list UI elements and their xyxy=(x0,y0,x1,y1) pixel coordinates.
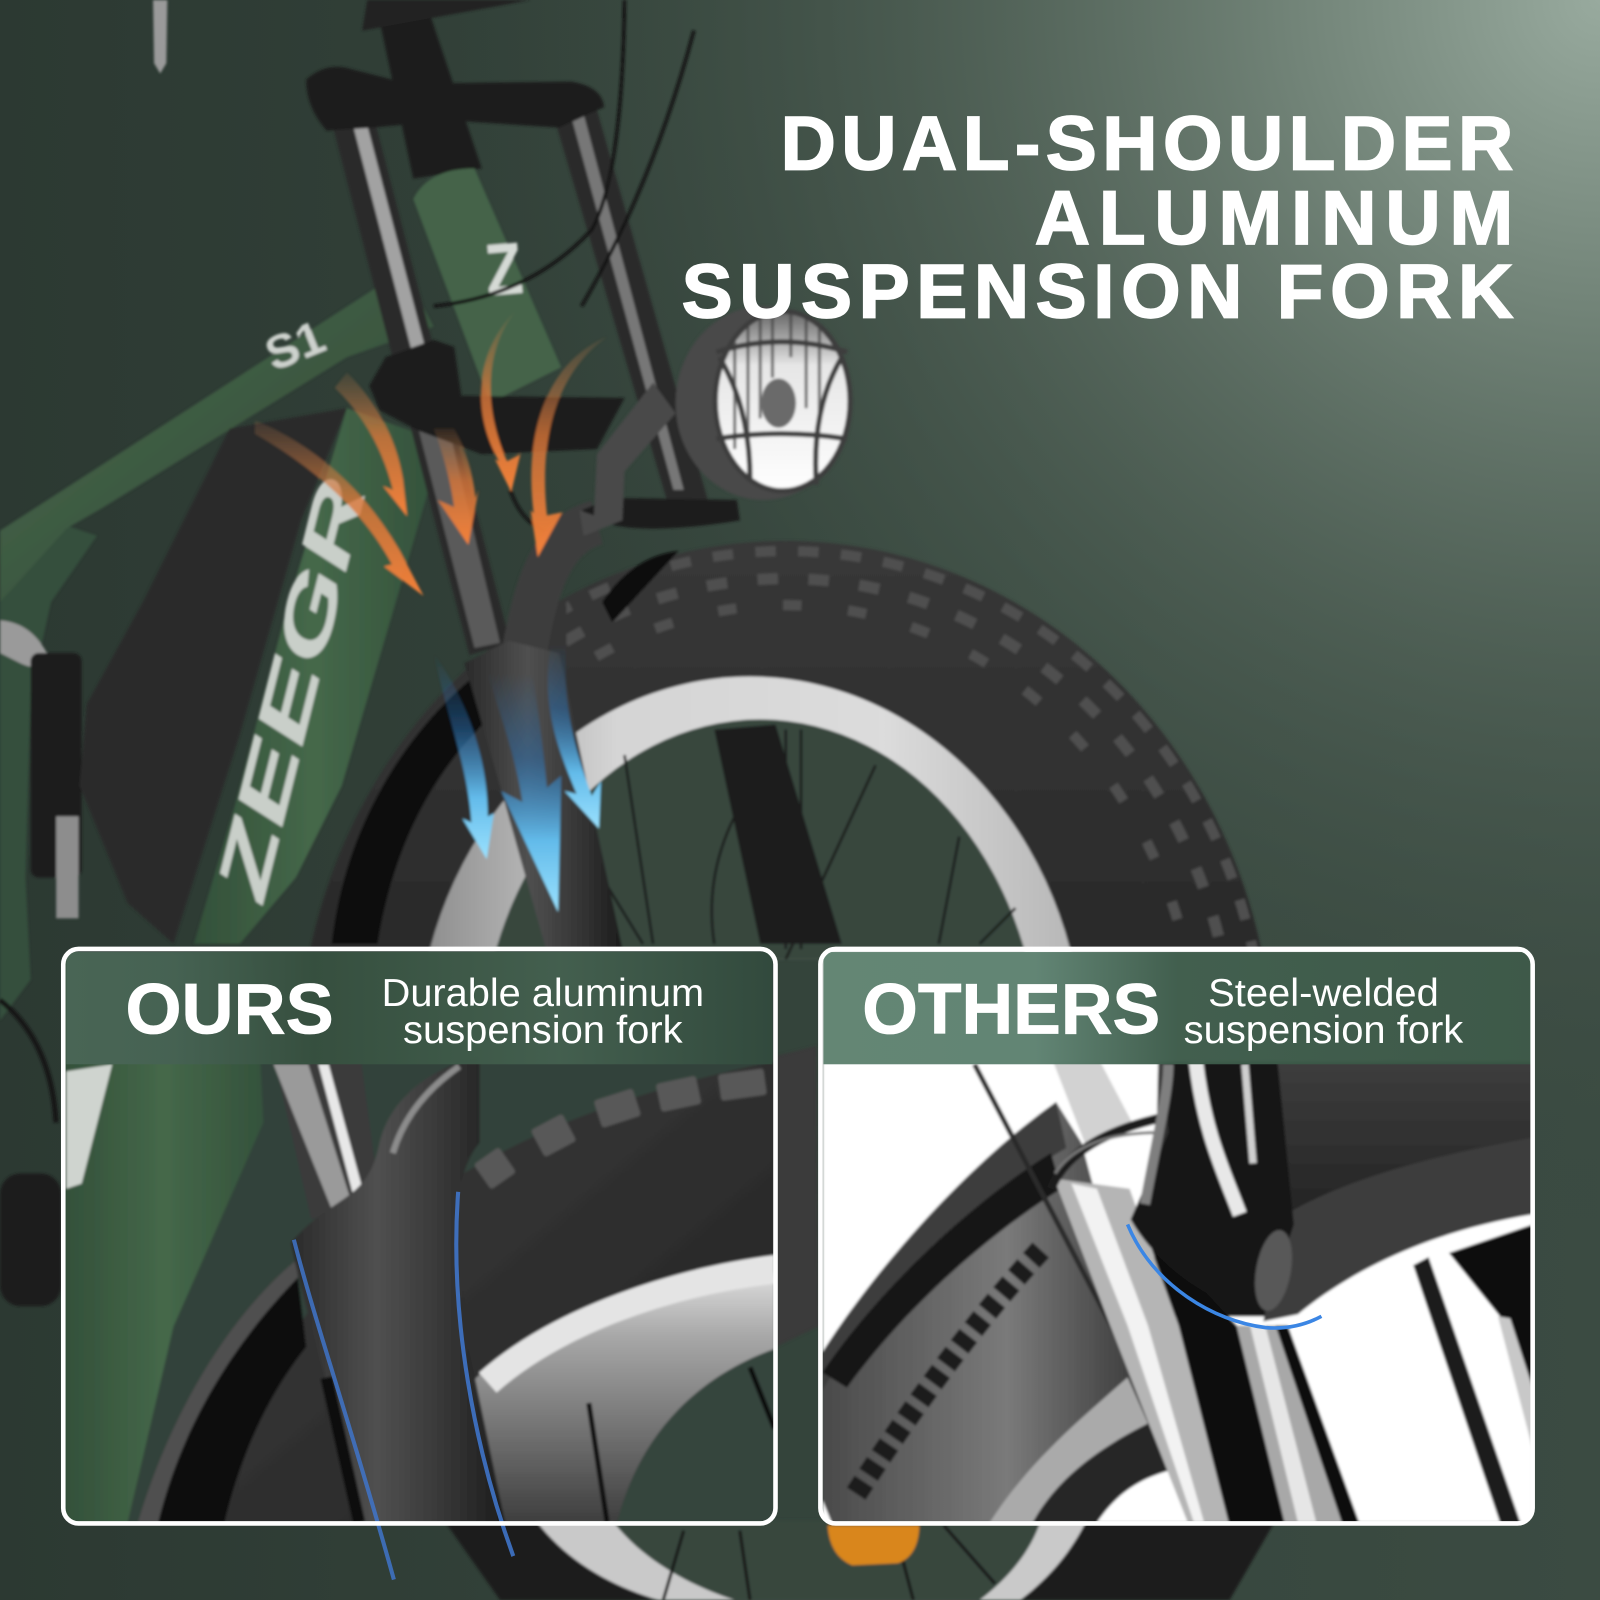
cables xyxy=(434,0,694,536)
ours blue contour lines xyxy=(294,1192,513,1580)
down tube xyxy=(194,408,434,944)
ours description: suspension fork xyxy=(403,1009,683,1052)
others heading: OTHERS xyxy=(862,970,1160,1050)
left lower frame and controls xyxy=(0,526,97,1306)
tire xyxy=(310,540,1262,946)
stem top clamp xyxy=(362,0,531,31)
front tire xyxy=(822,1102,1158,1522)
title: SUSPENSION FORK xyxy=(682,249,1513,334)
rim xyxy=(428,674,1072,952)
panel: ours xyxy=(63,949,776,1580)
arrows: cooling blue xyxy=(434,643,601,912)
lower stanchion xyxy=(1054,1179,1359,1522)
title: ALUMINUM xyxy=(1035,176,1513,261)
ours heading: OURS xyxy=(126,970,334,1050)
tire xyxy=(219,1061,774,1522)
fender xyxy=(158,1278,306,1522)
front wheel xyxy=(310,540,1262,959)
top tube xyxy=(0,270,434,602)
rear tire mass xyxy=(1153,1061,1533,1316)
others description: Steel-welded xyxy=(1208,972,1439,1015)
others header band xyxy=(823,952,1531,1064)
thin cable xyxy=(974,1064,1214,1522)
panel: others xyxy=(820,949,1533,1523)
ours description xyxy=(382,972,704,1052)
reflector xyxy=(828,1526,919,1565)
lower crown xyxy=(369,340,624,454)
fender band xyxy=(1263,1138,1533,1321)
right fork stanchion xyxy=(554,110,709,505)
stanchion xyxy=(272,1064,374,1218)
handlebar stem xyxy=(380,10,482,179)
frame logo fragment xyxy=(66,1064,112,1189)
rim xyxy=(474,1255,774,1522)
ours description: Durable aluminum xyxy=(382,972,704,1015)
wheel opening xyxy=(617,1349,774,1522)
fender xyxy=(822,1102,1066,1390)
bike illustration xyxy=(0,0,1276,1600)
icon: key at top left xyxy=(153,0,167,73)
fork leg xyxy=(1131,1061,1294,1316)
tire tread xyxy=(566,546,1258,947)
light bracket xyxy=(580,383,740,536)
battery xyxy=(80,408,347,944)
frame label: S1: S1 xyxy=(258,310,332,381)
tread knobs xyxy=(852,1250,1041,1500)
upper stanchion xyxy=(1053,1061,1135,1148)
frame logo: ZEEGR: ZEEGR xyxy=(200,471,383,910)
upper crown xyxy=(306,67,604,131)
fork arch xyxy=(522,522,597,663)
ours panel border xyxy=(63,949,776,1523)
collar xyxy=(1051,1117,1163,1189)
rim xyxy=(990,1378,1148,1522)
others blue contour line xyxy=(1128,1224,1321,1328)
head tube xyxy=(413,168,561,403)
others description xyxy=(1184,972,1464,1052)
tread xyxy=(474,1068,767,1190)
head tube logo: Z xyxy=(482,226,526,312)
others description: suspension fork xyxy=(1184,1009,1464,1052)
left fork stanchion xyxy=(327,100,510,655)
rear blades xyxy=(1413,1257,1520,1522)
wheel opening xyxy=(496,718,1026,961)
hub between panels xyxy=(776,1046,818,1347)
title: DUAL-SHOULDER xyxy=(781,101,1513,186)
fork leg xyxy=(291,1056,505,1522)
ours photo: close-up of aluminum fork xyxy=(64,950,774,1522)
rear fork blade xyxy=(714,724,842,944)
title xyxy=(682,101,1513,334)
arrows: heat orange xyxy=(255,311,607,596)
spokes xyxy=(602,730,1015,959)
headlight xyxy=(676,306,851,500)
others panel border xyxy=(820,949,1533,1523)
lower wheel below panels xyxy=(444,1520,1276,1600)
frame xyxy=(64,954,263,1522)
ours header band xyxy=(66,952,772,1064)
fender xyxy=(332,681,482,944)
fork leg xyxy=(464,641,622,949)
others photo: close-up of steel fork xyxy=(822,950,1533,1522)
